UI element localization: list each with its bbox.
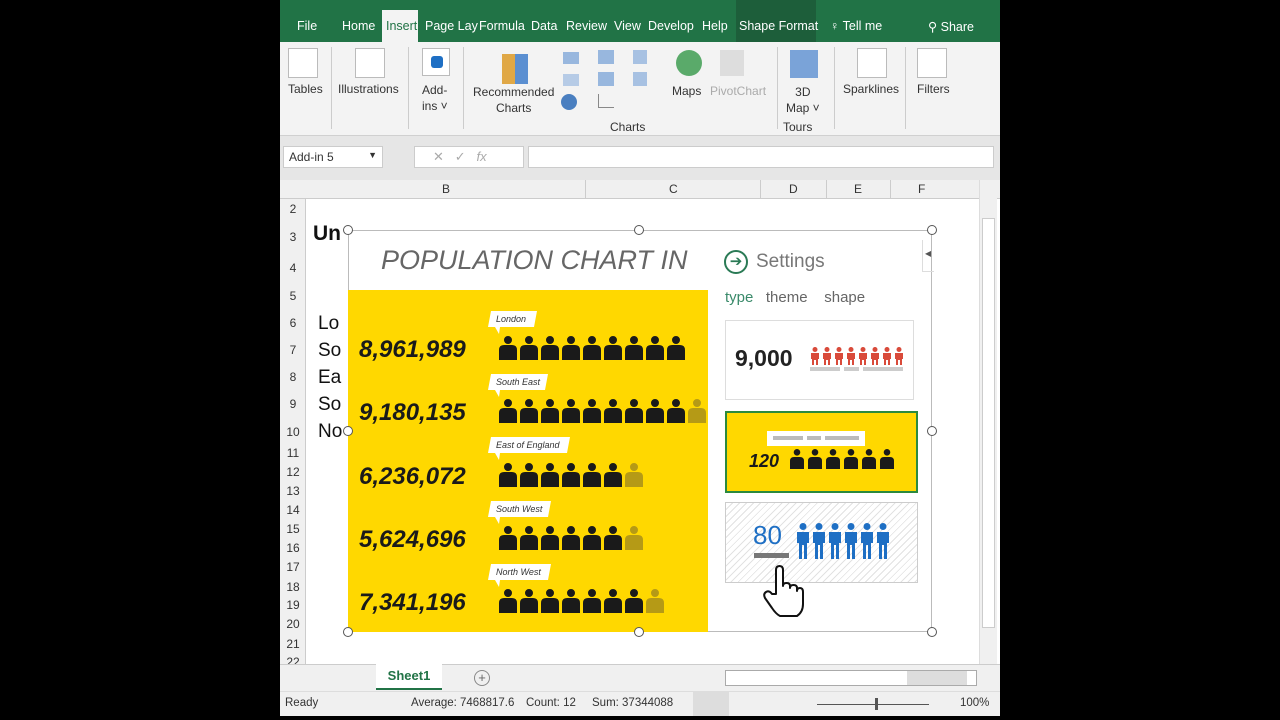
yellow chart panel: South West xyxy=(496,504,543,514)
formula bar: ✕ ✓ fx xyxy=(433,149,487,164)
text: No xyxy=(318,421,342,442)
ribbon: PivotChart xyxy=(710,84,766,98)
text: 20 xyxy=(286,617,300,631)
sheet tabs bar: + xyxy=(478,670,486,685)
tab labels: File xyxy=(297,19,317,33)
yellow chart panel: 5,624,696 xyxy=(359,526,466,553)
text: 17 xyxy=(286,560,300,574)
text: 2 xyxy=(290,202,296,216)
settings tabs: type theme shape xyxy=(725,289,865,306)
text: 6 xyxy=(290,316,296,330)
status bar: Ready xyxy=(285,697,318,709)
tab labels: ⚲ Share xyxy=(928,20,974,34)
option 3 hatched blue: 80 xyxy=(753,520,782,550)
ribbon: Charts xyxy=(496,101,531,115)
yellow chart panel: South East xyxy=(496,377,541,387)
text: 5 xyxy=(290,289,296,303)
yellow chart panel: 7,341,196 xyxy=(359,589,466,616)
column headers: C xyxy=(669,182,678,196)
text: Ea xyxy=(318,367,341,388)
text: 14 xyxy=(286,503,300,517)
text: 15 xyxy=(286,522,300,536)
status bar xyxy=(280,691,1000,716)
ribbon: Tables xyxy=(288,82,323,96)
yellow chart panel: 6,236,072 xyxy=(359,463,466,490)
settings heading xyxy=(724,250,825,274)
ribbon: Tours xyxy=(783,120,812,134)
formula bar: Add-in 5 xyxy=(289,150,334,164)
option 2 yellow selected xyxy=(725,411,918,493)
tab labels: Help xyxy=(702,19,728,33)
status bar: Sum: 37344088 xyxy=(592,697,673,709)
yellow chart panel xyxy=(348,290,708,632)
text: 16 xyxy=(286,541,300,555)
tab labels: Insert xyxy=(386,19,417,33)
ribbon: Maps xyxy=(672,84,701,98)
column headers: F xyxy=(918,182,925,196)
text: 4 xyxy=(290,261,296,275)
ribbon: Map ˅ xyxy=(786,101,820,115)
tab labels: Home xyxy=(342,19,375,33)
text: 19 xyxy=(286,598,300,612)
yellow chart panel: 8,961,989 xyxy=(359,336,466,363)
ribbon: 3D xyxy=(795,85,811,99)
ribbon tab bar xyxy=(280,0,1000,42)
sheet tabs bar: Sheet1 xyxy=(388,668,430,683)
status bar: 100% xyxy=(960,697,989,709)
text: 11 xyxy=(287,446,299,460)
yellow chart panel: East of England xyxy=(496,440,561,450)
option 1 white xyxy=(725,320,914,400)
tab labels xyxy=(297,19,974,34)
ribbon: Illustrations xyxy=(338,82,399,96)
text: So xyxy=(318,394,341,415)
text: 9 xyxy=(290,397,296,411)
text: ◀ xyxy=(925,249,931,258)
ribbon: Charts xyxy=(610,120,645,134)
status bar: Average: 7468817.6 xyxy=(411,697,514,709)
text: Lo xyxy=(318,313,339,334)
ribbon: Recommended xyxy=(473,85,554,99)
tab labels: ♀ Tell me xyxy=(830,19,882,33)
text: 12 xyxy=(286,465,300,479)
ribbon xyxy=(280,42,1000,135)
yellow chart panel: 9,180,135 xyxy=(359,399,466,426)
text: 3 xyxy=(290,230,296,244)
settings heading: ➔ xyxy=(730,253,742,270)
sheet text behind: Un xyxy=(313,222,341,245)
settings heading: Settings xyxy=(756,251,825,272)
column headers: E xyxy=(854,182,862,196)
tab labels: Review xyxy=(566,19,607,33)
text: 10 xyxy=(286,425,300,439)
chart title: POPULATION CHART IN xyxy=(381,245,688,275)
column headers: B xyxy=(442,182,450,196)
icon: hand cursor xyxy=(763,565,804,617)
settings panel xyxy=(724,240,934,617)
option 2 yellow selected: 120 xyxy=(749,451,779,471)
text: So xyxy=(318,340,341,361)
text: 8 xyxy=(290,370,296,384)
tab labels: View xyxy=(614,19,641,33)
vertical scrollbar xyxy=(979,180,997,665)
ribbon: Sparklines xyxy=(843,82,899,96)
tab labels: Develop xyxy=(648,19,694,33)
tab labels: Formula xyxy=(479,19,525,33)
ribbon: ins ˅ xyxy=(422,99,448,113)
yellow chart panel: London xyxy=(496,314,526,324)
status bar: Count: 12 xyxy=(526,697,576,709)
sheet tabs bar xyxy=(280,664,1000,691)
yellow chart panel: North West xyxy=(496,567,541,577)
formula bar xyxy=(280,135,1000,180)
text: 7 xyxy=(290,343,296,357)
tab labels: Page Lay xyxy=(425,19,478,33)
selection handles xyxy=(343,225,353,235)
tab labels: Data xyxy=(531,19,557,33)
add-in object xyxy=(348,230,932,632)
formula bar: ▼ xyxy=(368,150,377,160)
text: 18 xyxy=(286,580,300,594)
text: 13 xyxy=(286,484,300,498)
column headers: D xyxy=(789,182,798,196)
text: 21 xyxy=(286,637,300,651)
tab labels: Shape Format xyxy=(739,19,818,33)
option 3 hatched blue xyxy=(725,502,918,583)
ribbon: Add- xyxy=(422,83,447,97)
ribbon: Filters xyxy=(917,82,950,96)
column headers xyxy=(280,180,1000,199)
option 1 white: 9,000 xyxy=(735,345,793,371)
excel window xyxy=(280,0,1000,716)
row headers xyxy=(280,199,306,665)
text: 22 xyxy=(286,655,300,669)
